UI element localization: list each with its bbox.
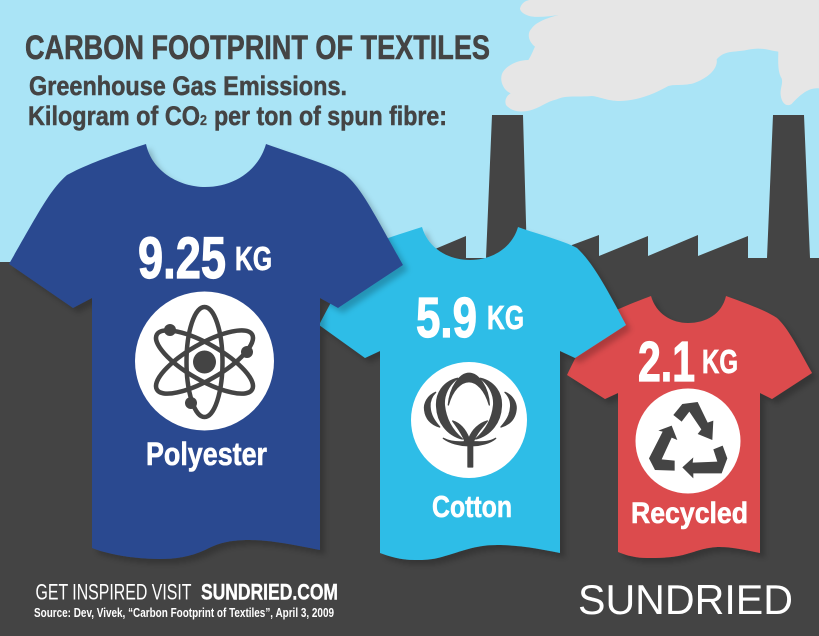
subtitle line 2: Kilogram of CO [28,101,200,131]
cotton label: Cotton [432,489,512,524]
panel: cotton t-shirt [319,227,626,560]
polyester label: Polyester [146,436,267,472]
title: CARBON FOOTPRINT OF TEXTILES [25,29,490,67]
source citation: Source: Dev, Vivek, “Carbon Footprint of Textiles”, April 3, 2009 [34,606,334,620]
icon: recycle [636,388,740,494]
cotton unit: KG [487,299,524,336]
subtitle line 1: Greenhouse Gas Emissions. [29,71,347,101]
icon: cotton boll [411,362,527,478]
subtitle line 2 [28,101,447,131]
recycled unit: KG [702,343,738,380]
brand logo: SUNDRIED [578,576,793,623]
footer call to action: GET INSPIRED VISIT [36,580,192,604]
polyester value: 9.25 [138,226,226,291]
footer call to action: SUNDRIED.COM [201,580,338,604]
polyester unit: KG [235,240,272,277]
blue shirt shape [9,144,403,559]
icon: atom [135,292,274,430]
recycled value: 2.1 [638,330,695,394]
cotton shirt shape [319,227,626,560]
panel: recycled t-shirt [567,296,812,558]
red shirt shape [567,296,812,558]
panel: polyester t-shirt [9,144,403,559]
recycled label: Recycled [631,497,748,530]
subtitle line 2: per ton of spun fibre: [214,101,447,131]
cotton value: 5.9 [416,286,477,350]
subtitle line 2: 2 [200,112,207,129]
smoke cloud [501,0,819,111]
